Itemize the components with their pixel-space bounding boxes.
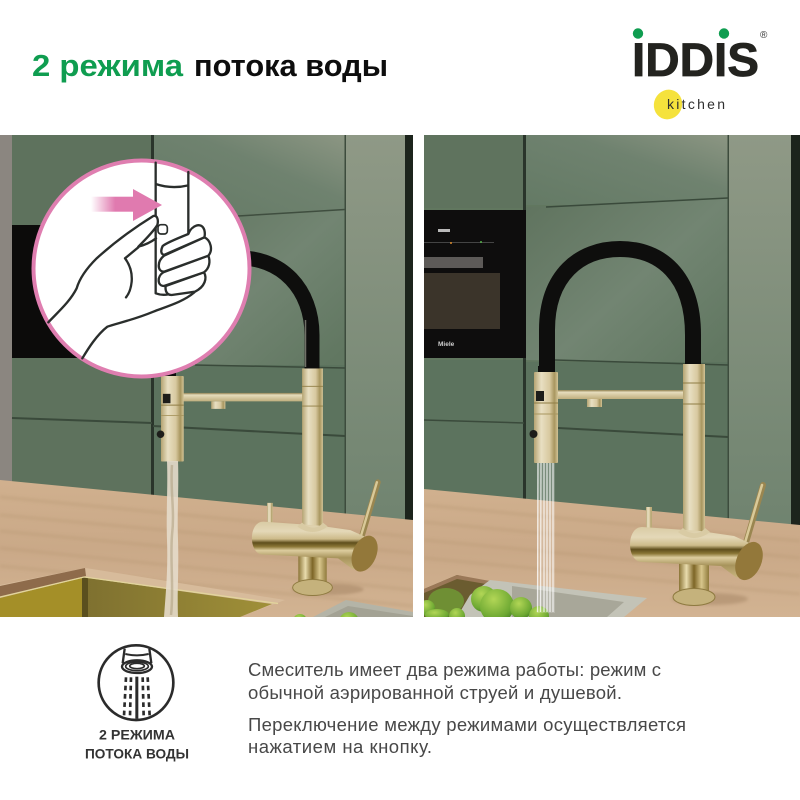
logo: IDDIS kitchen: ® [760, 30, 768, 41]
icon label: 2 РЕЖИМА [99, 726, 175, 742]
kitchen cabinets, left photo [0, 135, 413, 535]
callout: hand pressing the button [34, 160, 250, 376]
description text: нажатием на кнопку. [248, 736, 432, 757]
kitchen cabinets, right photo [424, 135, 800, 535]
logo: IDDIS kitchen: kitchen [667, 96, 725, 112]
faucet hose, left photo [162, 258, 312, 378]
title [32, 48, 388, 83]
icon label: ПОТОКА ВОДЫ [85, 746, 189, 762]
faucet hose, right photo [538, 249, 693, 374]
logo: IDDIS kitchen: IDDIS [632, 33, 759, 86]
faucet, left photo [157, 368, 383, 595]
panel: photo left, aerated stream [0, 135, 413, 632]
title: потока воды [194, 48, 388, 83]
icon: hand on spray head [48, 163, 211, 358]
faucet, right photo [530, 364, 768, 606]
title: 2 режима [32, 48, 184, 83]
description text: Смеситель имеет два режима работы: режим с [248, 659, 661, 680]
oven, right photo: Miele [438, 341, 455, 348]
arrow: press direction [91, 189, 162, 221]
countertop, left photo [0, 480, 413, 617]
logo: IDDIS kitchen [632, 28, 768, 124]
water: aerated stream [164, 461, 178, 617]
sink, left photo [0, 568, 413, 617]
description text: обычной аэрированной струей и душевой. [248, 682, 622, 703]
oven, right photo [424, 210, 526, 358]
panel: photo right, shower stream [419, 135, 800, 626]
sink with limes, right photo [424, 575, 647, 617]
icon label [85, 726, 189, 762]
icon: two water flow modes [99, 645, 173, 720]
description text [248, 659, 686, 757]
water: shower stream [537, 463, 555, 613]
description text: Переключение между режимами осуществляется [248, 714, 686, 735]
countertop, right photo [424, 489, 800, 617]
